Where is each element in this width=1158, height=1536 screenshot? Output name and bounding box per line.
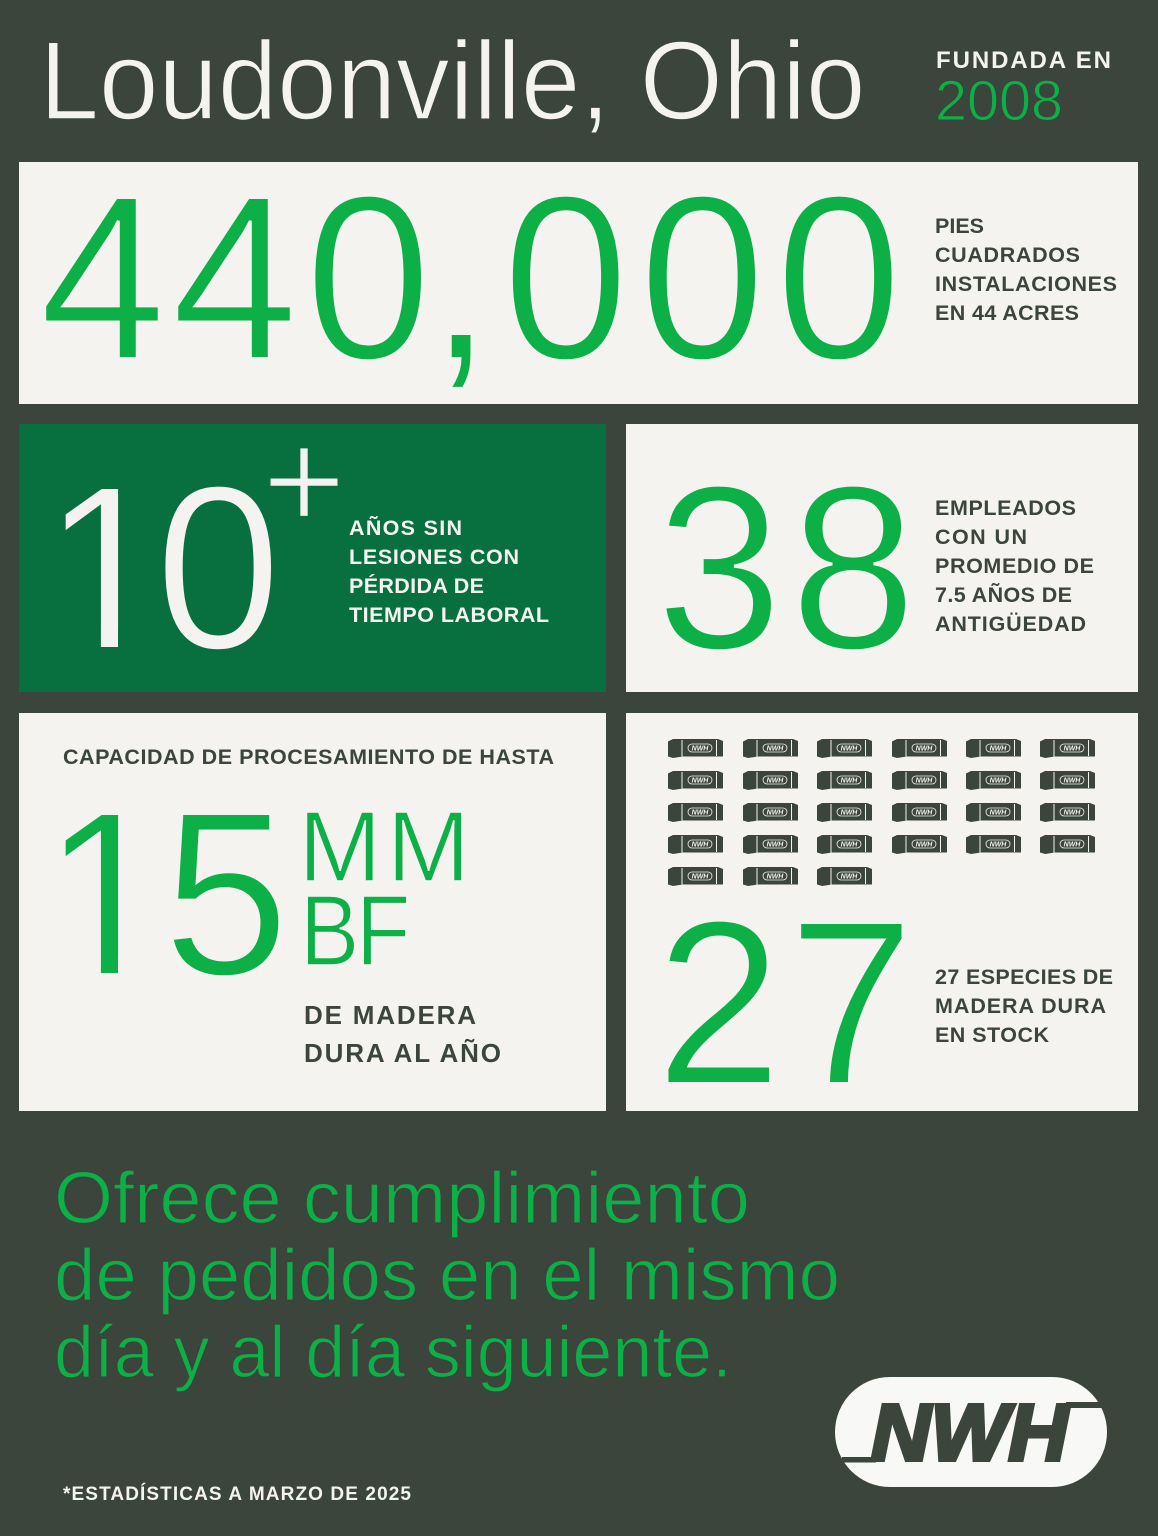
lumber bundle icons: NWH xyxy=(841,746,858,752)
lumber bundle icons: NWH xyxy=(841,874,858,880)
founded year xyxy=(935,47,1111,133)
lumber bundle icons: NWH xyxy=(916,842,933,848)
tagline xyxy=(54,1158,840,1393)
big number 15: 15 xyxy=(42,762,289,1024)
employees label: ANTIGÜEDAD xyxy=(935,611,1086,636)
species label xyxy=(935,965,1113,1047)
lumber bundle icons: NWH xyxy=(692,746,709,752)
panel: square feet xyxy=(19,146,1138,408)
tagline: día y al día siguiente. xyxy=(54,1312,732,1393)
square feet label: CUADRADOS xyxy=(935,243,1080,267)
species label: 27 ESPECIES DE xyxy=(935,965,1113,989)
lumber bundle icons: NWH xyxy=(767,842,784,848)
injury label: PÉRDIDA DE xyxy=(349,573,484,598)
panel: years without injury xyxy=(19,424,606,692)
square feet label: EN 44 ACRES xyxy=(935,301,1079,325)
lumber bundle icons: NWH xyxy=(692,810,709,816)
lumber bundle icons: NWH xyxy=(767,778,784,784)
lumber bundle icons: NWH xyxy=(1064,746,1081,752)
lumber bundle icons: NWH xyxy=(990,746,1007,752)
capacity heading: CAPACIDAD DE PROCESAMIENTO DE HASTA xyxy=(63,745,554,769)
big number 38: 38 xyxy=(656,436,916,698)
lumber bundle icons xyxy=(668,739,1095,886)
unit MM BF xyxy=(298,791,470,987)
employees label: CON UN xyxy=(935,525,1027,549)
lumber bundle icons: NWH xyxy=(990,810,1007,816)
lumber bundle icons: NWH xyxy=(692,778,709,784)
lumber bundle icons: NWH xyxy=(990,778,1007,784)
lumber bundle icons: NWH xyxy=(1064,778,1081,784)
lumber bundle icons: NWH xyxy=(767,746,784,752)
employees label: EMPLEADOS xyxy=(935,496,1076,520)
species label: MADERA DURA xyxy=(935,994,1106,1018)
title: Loudonville, Ohio xyxy=(40,19,866,143)
unit MM BF: MM xyxy=(298,791,470,903)
lumber bundle icons: NWH xyxy=(841,810,858,816)
lumber bundle icons: NWH xyxy=(692,842,709,848)
employees label: 7.5 AÑOS DE xyxy=(935,582,1072,607)
lumber bundle icons: NWH xyxy=(1064,810,1081,816)
logo: NWH xyxy=(835,1377,1107,1487)
lumber bundle icons: NWH xyxy=(692,874,709,880)
lumber bundle icons: NWH xyxy=(767,874,784,880)
lumber bundle icons: NWH xyxy=(990,842,1007,848)
logo: NWH: NWH xyxy=(871,1388,1070,1477)
lumber bundle icons: NWH xyxy=(1064,842,1081,848)
panel: processing capacity xyxy=(19,713,606,1111)
square feet label: INSTALACIONES xyxy=(935,272,1117,296)
founded year: 2008 xyxy=(935,69,1063,133)
founded year: FUNDADA EN xyxy=(936,47,1111,74)
employees label xyxy=(935,496,1094,636)
big number 27: 27 xyxy=(656,871,914,1133)
plus sign: + xyxy=(262,400,346,561)
injury label: TIEMPO LABORAL xyxy=(349,603,549,627)
panel: species xyxy=(626,713,1138,1133)
big number 440,000: 440,000 xyxy=(40,146,902,408)
species label: EN STOCK xyxy=(935,1023,1049,1047)
lumber bundle icons: NWH xyxy=(841,842,858,848)
capacity label: DE MADERA xyxy=(304,1000,476,1030)
unit MM BF: BF xyxy=(300,875,410,987)
lumber bundle icons: NWH xyxy=(767,810,784,816)
injury label: LESIONES CON xyxy=(349,545,519,569)
panel: employees xyxy=(626,424,1138,698)
square feet label: PIES xyxy=(935,214,984,238)
injury label: AÑOS SIN xyxy=(349,515,462,540)
tagline: de pedidos en el mismo xyxy=(54,1235,840,1316)
tagline: Ofrece cumplimiento xyxy=(54,1158,750,1239)
square feet label xyxy=(935,214,1117,325)
footnote: *ESTADÍSTICAS A MARZO DE 2025 xyxy=(63,1483,411,1505)
lumber bundle icons: NWH xyxy=(916,810,933,816)
injury label xyxy=(349,515,549,627)
lumber bundle icons: NWH xyxy=(916,746,933,752)
capacity label: DURA AL AÑO xyxy=(304,1038,501,1068)
capacity label xyxy=(304,1000,501,1068)
employees label: PROMEDIO DE xyxy=(935,554,1094,578)
lumber bundle icons: NWH xyxy=(841,778,858,784)
big number 10: 10 xyxy=(42,436,281,698)
lumber bundle icons: NWH xyxy=(916,778,933,784)
